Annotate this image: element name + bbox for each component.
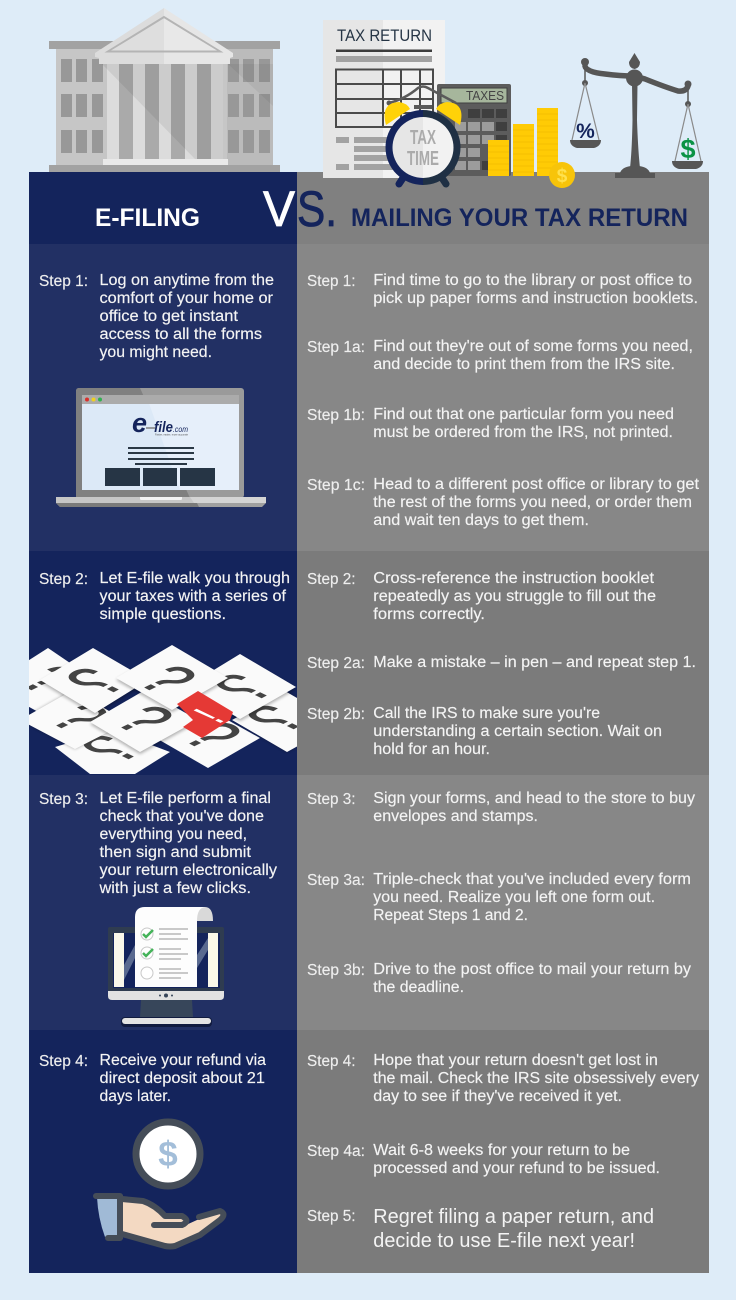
e-file step 3: your return electronically xyxy=(100,862,277,879)
mail step 3a: Triple-check that you've included every form xyxy=(373,871,691,888)
mail step 1: pick up paper forms and instruction booklets. xyxy=(373,290,698,307)
mail step 5 xyxy=(307,1205,654,1252)
mail step 3b: Step 3b: xyxy=(307,962,365,979)
mail step 4a: Wait 6-8 weeks for your return to be xyxy=(373,1142,630,1159)
icon: scattered question mark papers: ? xyxy=(4,657,94,702)
mail step 1b: Step 1b: xyxy=(307,407,365,424)
e-file step 3: Let E-file perform a final xyxy=(100,790,271,807)
mail step 1b xyxy=(307,406,674,441)
icon: scattered question mark papers: ? xyxy=(34,695,124,740)
e-file step 3: check that you've done xyxy=(100,808,264,825)
icon: scattered question mark papers: ? xyxy=(167,713,257,758)
mail step 3b: Drive to the post office to mail your return by xyxy=(373,961,691,978)
e-file step 4 xyxy=(39,1052,266,1105)
icon: scattered question mark papers: ? xyxy=(199,665,289,710)
mail step 2b: understanding a certain section. Wait on xyxy=(373,723,662,740)
e-file step 2: simple questions. xyxy=(100,606,226,623)
e-file step 2: Step 2: xyxy=(39,571,88,588)
e-file step 2: your taxes with a series of xyxy=(100,588,287,605)
mail step 4: Step 4: xyxy=(307,1053,356,1070)
mail step 1: Step 1: xyxy=(307,273,356,290)
icon: scattered question mark papers xyxy=(29,645,297,774)
illustration: balance scale: % xyxy=(576,120,595,143)
mail step 4a: processed and your refund to be issued. xyxy=(373,1160,660,1177)
mail step 3a: you need. Realize you left one form out. xyxy=(373,889,655,906)
mail step 1c: Step 1c: xyxy=(307,477,365,494)
mail step 3: envelopes and stamps. xyxy=(373,808,538,825)
icon: scattered question mark papers: ? xyxy=(51,659,141,704)
e-file step 1: access to all the forms xyxy=(100,326,262,343)
e-file step 4: Step 4: xyxy=(39,1053,88,1070)
mail step 3a: Repeat Steps 1 and 2. xyxy=(373,907,528,924)
mail step 1a xyxy=(307,338,693,373)
e-file step 3: Step 3: xyxy=(39,791,88,808)
mail step 2: repeatedly as you struggle to fill out the xyxy=(373,588,656,605)
e-file step 1: Step 1: xyxy=(39,273,88,290)
illustration: balance scale: $ xyxy=(680,134,696,164)
e-file step 1: you might need. xyxy=(100,344,212,361)
mail step 1b: must be ordered from the IRS, not printed. xyxy=(373,424,673,441)
icon: laptop with e-file site xyxy=(56,388,266,507)
icon: desktop monitor with checklist xyxy=(108,907,224,1027)
e-file step 2: Let E-file walk you through xyxy=(100,570,290,587)
e-file step 1: comfort of your home or xyxy=(100,290,273,307)
mail step 2 xyxy=(307,570,656,623)
mail step 1a: Find out they're out of some forms you need, xyxy=(373,338,693,355)
mail step 4a: Step 4a: xyxy=(307,1143,365,1160)
heading: vs: V xyxy=(263,181,296,237)
mail step 5: Step 5: xyxy=(307,1208,356,1225)
illustration: stacks of gold coins: $ xyxy=(557,166,568,187)
e-file step 4: direct deposit about 21 xyxy=(100,1070,265,1087)
mail step 4 xyxy=(307,1052,699,1105)
illustration: tax return form xyxy=(323,20,445,178)
icon: laptop with e-file site: e xyxy=(132,408,147,438)
e-file step 4: days later. xyxy=(100,1088,171,1105)
mail step 2: forms correctly. xyxy=(373,606,485,623)
illustration: tax return form: TAX RETURN xyxy=(337,27,432,45)
mail step 3b: the deadline. xyxy=(373,979,464,996)
icon: red exclamation paper xyxy=(177,691,234,738)
mail step 1c: and wait ten days to get them. xyxy=(373,512,589,529)
mail step 2b: Step 2b: xyxy=(307,706,365,723)
icon: red exclamation paper: ! xyxy=(185,704,234,728)
e-file step 3: with just a few clicks. xyxy=(98,880,251,897)
icon: laptop with e-file site: .com xyxy=(173,424,188,434)
mail step 5: Regret filing a paper return, and xyxy=(373,1205,654,1228)
heading: vs: S. xyxy=(297,181,337,237)
e-file step 3: then sign and submit xyxy=(100,844,252,861)
illustration: government building xyxy=(49,8,280,172)
icon: hand receiving dollar coin: $ xyxy=(158,1135,178,1174)
mail step 4: day to see if they've received it yet. xyxy=(373,1088,622,1105)
mail step 4: Hope that your return doesn't get lost in xyxy=(373,1052,658,1069)
illustration: calculator xyxy=(437,84,511,176)
mail step 1c xyxy=(307,476,700,529)
mail step 3a: Step 3a: xyxy=(307,872,365,889)
mail step 3a xyxy=(307,871,691,924)
illustration: balance scale xyxy=(570,53,703,178)
e-file step 3: everything you need, xyxy=(100,826,247,843)
icon: scattered question mark papers: ? xyxy=(231,696,321,741)
e-file step 4: Receive your refund via xyxy=(100,1052,266,1069)
illustration: alarm clock xyxy=(385,86,461,185)
e-file step 1: Log on anytime from the xyxy=(100,272,274,289)
e-file step 1: office to get instant xyxy=(100,308,239,325)
mail step 1: Find time to go to the library or post office to xyxy=(373,272,692,289)
icon: laptop with e-file site: Faster, easier, more accurate xyxy=(155,434,189,436)
icon: scattered question mark papers: ? xyxy=(66,726,156,771)
heading: vs xyxy=(263,181,337,237)
heading: mailing your tax return: MAILING YOUR TAX RETURN xyxy=(351,204,688,232)
mail step 2: Step 2: xyxy=(307,571,356,588)
heading: e-filing: E-FILING xyxy=(95,204,200,232)
mail step 3 xyxy=(307,790,695,825)
mail step 4a xyxy=(307,1142,660,1177)
mail step 2: Cross-reference the instruction booklet xyxy=(373,570,655,587)
mail step 2b: Call the IRS to make sure you're xyxy=(373,705,600,722)
mail step 2a: Make a mistake – in pen – and repeat step 1. xyxy=(373,654,696,671)
mail step 1 xyxy=(307,272,698,307)
mail step 4: the mail. Check the IRS site obsessively every xyxy=(373,1070,699,1087)
panel: e-filing column xyxy=(29,244,297,1273)
illustration: calculator: TAXES xyxy=(466,89,504,103)
mail step 1c: the rest of the forms you need, or order them xyxy=(373,494,692,511)
mail step 5: decide to use E-file next year! xyxy=(373,1229,635,1252)
icon: scattered question mark papers: ? xyxy=(122,657,212,702)
icon: scattered question mark papers: ? xyxy=(99,697,189,742)
e-file step 1 xyxy=(39,272,274,361)
mail step 1a: Step 1a: xyxy=(307,339,365,356)
illustration: alarm clock: TAX xyxy=(410,127,436,149)
e-file step 2 xyxy=(39,570,290,623)
mail step 1c: Head to a different post office or library to get xyxy=(373,476,700,493)
e-file step 3 xyxy=(39,790,277,897)
mail step 3: Step 3: xyxy=(307,791,356,808)
panel: mailing column xyxy=(297,244,709,1273)
mail step 2b: hold for an hour. xyxy=(373,741,490,758)
illustration: stacks of gold coins xyxy=(488,108,575,188)
icon: laptop with e-file site: file xyxy=(154,420,173,436)
mail step 1a: and decide to print them from the IRS site. xyxy=(373,356,675,373)
mail step 3b xyxy=(307,961,691,996)
illustration: alarm clock: TIME xyxy=(407,148,439,170)
panel: header band xyxy=(29,172,709,244)
mail step 1b: Find out that one particular form you need xyxy=(373,406,674,423)
icon: hand receiving dollar coin xyxy=(96,1122,224,1246)
mail step 2b xyxy=(307,705,662,758)
mail step 3: Sign your forms, and head to the store to buy xyxy=(373,790,695,807)
mail step 2a: Step 2a: xyxy=(307,655,365,672)
